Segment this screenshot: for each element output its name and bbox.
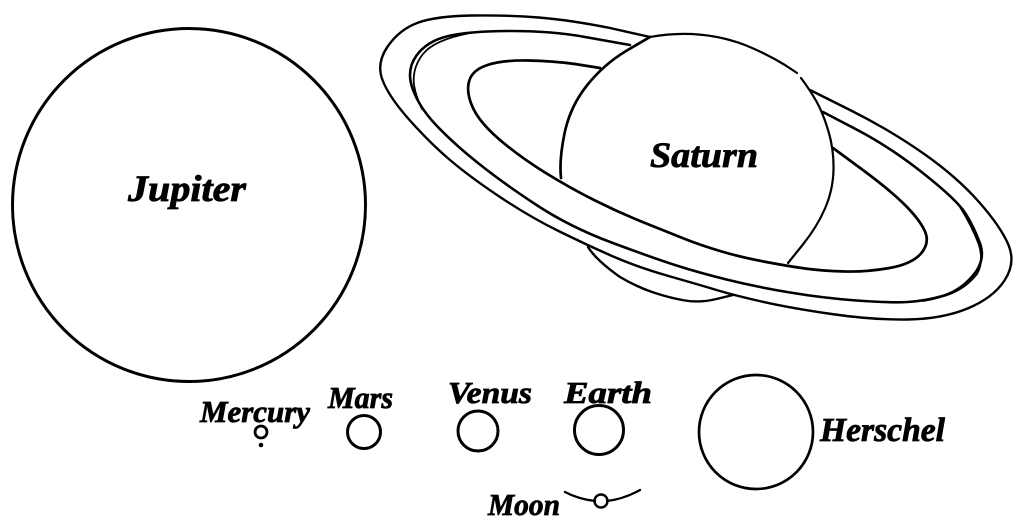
planet: Mercury bbox=[199, 394, 310, 447]
Saturn globe bbox=[560, 37, 650, 178]
planet: Jupiter bbox=[12, 28, 366, 382]
label: Mars: Mars bbox=[327, 380, 393, 415]
Saturn inner ring edge bbox=[468, 60, 927, 272]
label: Mercury: Mercury bbox=[199, 394, 310, 429]
planet: Mars bbox=[327, 380, 393, 448]
Saturn middle ring edge bbox=[410, 31, 982, 302]
Saturn outer ring edge bbox=[380, 15, 1011, 320]
label: Herschel: Herschel bbox=[819, 412, 946, 449]
planet: Herschel bbox=[699, 375, 946, 489]
Saturn ring double line bbox=[414, 33, 981, 301]
planet: Venus bbox=[448, 375, 532, 451]
label: Moon: Moon bbox=[487, 487, 560, 522]
planet: Earth bbox=[563, 375, 652, 454]
planet: Moon with orbit arc bbox=[487, 487, 640, 522]
label: Venus: Venus bbox=[448, 375, 532, 410]
label: Jupiter: Jupiter bbox=[127, 169, 247, 210]
Saturn globe lower limb bbox=[588, 247, 733, 301]
label: Earth: Earth bbox=[563, 375, 652, 410]
planet: Saturn with rings bbox=[380, 15, 1011, 320]
label: Saturn: Saturn bbox=[650, 135, 758, 175]
